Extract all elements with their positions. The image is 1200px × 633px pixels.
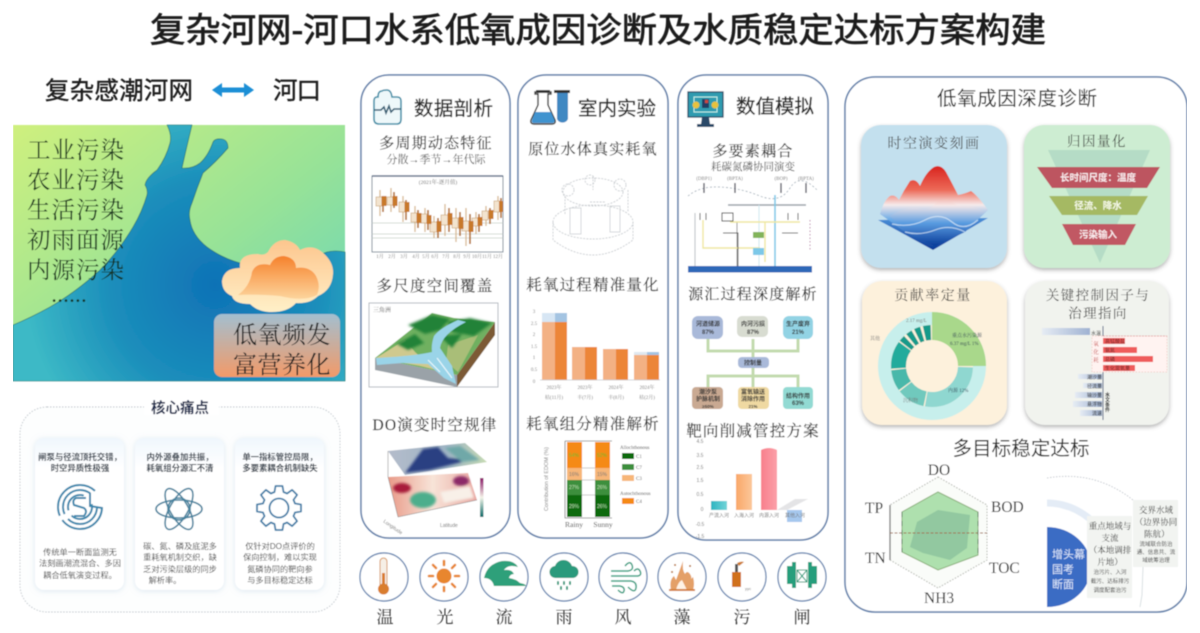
zone: national section xyxy=(1047,527,1091,607)
card: spatial heterogeneity: 法刻画潮流混合、多因 xyxy=(39,558,121,568)
chart: reduction bars: 内源入河 xyxy=(759,512,779,519)
diagram: source-sink flow: 结构作用 xyxy=(786,392,810,400)
zone: national section: 增头幕 xyxy=(1052,547,1085,561)
card: spatial heterogeneity xyxy=(35,438,124,590)
card: source interaction: 碳、氮、磷及底泥多 xyxy=(143,541,217,551)
chart: factor bars: 径流量 xyxy=(1087,383,1102,390)
heading: river network: 复杂感潮河网 xyxy=(45,77,193,105)
chart: stacked components: Allochthonous xyxy=(620,446,649,451)
card: control gap: 保向控制，难以实现 xyxy=(243,552,317,562)
heading: estuary: 河口 xyxy=(273,77,321,105)
icon: algae xyxy=(658,553,706,627)
chart: factor bars: 流速 xyxy=(1092,410,1102,417)
chart: donut: 重点水污染源 xyxy=(952,332,983,339)
diagram: biogeochemical model xyxy=(688,177,818,272)
funnel tier 3 xyxy=(1062,224,1136,245)
chart: factor bars: 潮汐量 xyxy=(1087,374,1102,381)
chart: donut: 内源 12% xyxy=(948,387,968,394)
pollution list: 生活污染 xyxy=(27,197,125,224)
card: attribution: 归因量化 xyxy=(1067,134,1127,149)
chart: radar: TN xyxy=(865,550,886,567)
diagram: source-sink flow: 潮汐泵 xyxy=(699,388,717,396)
chart: reduction bars: -0.5 xyxy=(696,522,705,528)
diagram: source-sink flow: ≥50% xyxy=(702,404,714,409)
chart: stacked components: Contribution of EDOM (%) xyxy=(544,447,550,511)
subheading: component analysis: 耗氧组分精准解析 xyxy=(526,415,660,433)
chart: monthly boxplot: 9月 xyxy=(463,253,471,260)
title: 复杂河网-河口水系低氧成因诊断及水质稳定达标方案构建 xyxy=(150,12,1046,50)
chart: radar xyxy=(865,462,1024,607)
card: control gap: 氮磷协同的靶向参 xyxy=(247,564,313,574)
chart: oxygen consumption bars: 2024年 xyxy=(639,384,655,391)
icon: sluice: 闸 xyxy=(794,608,810,627)
chart: monthly boxplot: 3月 xyxy=(400,253,408,260)
chart: monthly boxplot: 12月 xyxy=(493,253,503,260)
chart: monthly boxplot: 8月 xyxy=(453,253,461,260)
icon: sluice xyxy=(778,553,826,627)
diagram: experiment device xyxy=(553,175,633,255)
panel: numerical simulation xyxy=(678,75,828,540)
zone: national section: 国考 xyxy=(1052,563,1074,576)
chart: stacked components: 16% xyxy=(569,472,580,478)
chart: layered DO map: Longitude xyxy=(382,519,403,536)
icon: light: 光 xyxy=(436,608,454,627)
card: spatial heterogeneity: 时空异质性极强 xyxy=(51,463,110,473)
chart: reduction bars: 3.5 xyxy=(697,453,704,459)
chart: donut: 沉积物 xyxy=(903,397,918,404)
chart: donut: 其他 xyxy=(870,335,880,342)
chart: layered DO map: Latitude xyxy=(440,523,458,529)
chart: stacked components: 15% xyxy=(597,472,608,478)
card: control gap: 与多目标稳定达标 xyxy=(247,575,313,585)
chart: oxygen consumption bars: 2023年 xyxy=(577,384,593,391)
arrow: two-way xyxy=(212,83,254,97)
chart: monthly boxplot: 5月 xyxy=(422,253,430,260)
zone: boundary waters xyxy=(1133,500,1178,567)
chart: oxygen consumption bars: 0.5 xyxy=(531,368,538,373)
chart: 3D surface xyxy=(878,166,988,250)
icon: pollution xyxy=(718,553,766,627)
funnel tier 2: 径流、降水 xyxy=(1074,200,1122,212)
chart: stacked components: 54% xyxy=(569,453,580,459)
diagram: source-sink flow: 87% xyxy=(747,330,760,336)
icon: temperature: 温 xyxy=(376,608,394,627)
subheading: DO pattern: DO演变时空规律 xyxy=(372,416,498,434)
card: control gap: 多要素耦合机制缺失 xyxy=(242,463,318,473)
zone: key areas and tributaries: 支流 xyxy=(1101,533,1119,543)
zone: boundary waters: 流域联合防治 xyxy=(1139,540,1173,548)
zone: boundary waters: 交界水域 xyxy=(1139,505,1173,515)
heading: data analysis: 数据剖析 xyxy=(414,98,493,120)
chart: oxygen consumption bars: 2 xyxy=(533,333,536,338)
chart: factor bars: 高锰酸盐 xyxy=(1105,338,1125,345)
funnel tier 1 xyxy=(1037,167,1160,188)
chart: stacked components: C1 xyxy=(636,455,642,460)
chart: radar: TOC xyxy=(989,560,1020,577)
chart: reduction bars: 1.5 xyxy=(697,478,704,484)
card: attribution xyxy=(1024,125,1170,268)
chart: donut: 6.37 mg/L 1% xyxy=(950,342,979,347)
chart: monthly boxplot: 7月 xyxy=(442,253,450,260)
icon: light xyxy=(420,553,468,627)
pollution list xyxy=(27,137,125,306)
panel: hypoxia diagnosis xyxy=(845,77,1187,612)
icon: data bag xyxy=(374,90,401,124)
image: terrain block xyxy=(369,303,498,387)
chart: oxygen consumption bars: 3 xyxy=(533,310,536,315)
pollution list: 工业污染 xyxy=(27,137,125,164)
diagram: management zones xyxy=(1047,476,1178,607)
chart: factor bars: 总磷 xyxy=(1105,356,1115,363)
image: terrain block: 三角洲 xyxy=(373,306,391,314)
chart: stacked components: Rainy xyxy=(565,520,583,529)
heading: lab experiments: 室内实验 xyxy=(578,98,656,120)
chart: factor bars: 悬浮物 xyxy=(1087,401,1102,408)
chart: reduction bars: 入海入河 xyxy=(734,512,754,519)
icon: algae: 藻 xyxy=(674,608,690,627)
subheading: oxygen process: 耗氧过程精准量化 xyxy=(526,276,660,294)
chart: reduction bars: 0 xyxy=(701,507,704,513)
panel: lab experiments xyxy=(518,75,668,538)
zone: key areas and tributaries: 治污片、入河 xyxy=(1093,568,1127,576)
card: control gap xyxy=(235,438,324,590)
chart: monthly boxplot: 4月 xyxy=(412,253,420,260)
diagram: source-sink flow: 消除作用 xyxy=(741,395,765,403)
diagram: source-sink flow: 21% xyxy=(792,330,805,336)
panel: data analysis xyxy=(361,75,510,538)
chart: factor bars xyxy=(1042,326,1167,420)
chart: reduction bars: 0.5 xyxy=(697,492,704,498)
diagram: biogeochemical model: (DBP1) xyxy=(696,177,712,182)
card: spatiotemporal xyxy=(861,125,1007,268)
diagram: biogeochemical model: (BPTA) xyxy=(727,177,743,182)
chart: stacked components: C7 xyxy=(636,466,642,471)
heading: numerical simulation: 数值模拟 xyxy=(736,96,814,118)
chart: oxygen consumption bars: 1.5 xyxy=(531,345,538,350)
subheading: synergy: 耗碳氮磷协同演变 xyxy=(711,160,795,173)
chart: factor bars: 水温 xyxy=(1091,330,1101,337)
card: contribution xyxy=(862,281,1007,425)
status box xyxy=(214,314,340,379)
subheading: multi-factor coupling: 多要素耦合 xyxy=(712,142,794,160)
zone: boundary waters: 通、信息共、流 xyxy=(1137,548,1176,556)
status box: 富营养化 xyxy=(233,352,331,379)
chart: stacked components: 52% xyxy=(597,453,608,459)
chart: oxygen consumption bars: 2.5 xyxy=(531,322,538,327)
icon: wind: 风 xyxy=(614,608,632,627)
card: control gap: 单一指标管控局限， xyxy=(242,452,318,462)
icon: rain: 雨 xyxy=(556,608,572,627)
pollution list: ...... xyxy=(52,287,88,306)
chart: radar: DO xyxy=(928,462,950,479)
chart: radar: TP xyxy=(865,500,883,517)
card: key factors xyxy=(1025,281,1169,425)
status box: 低氧频发 xyxy=(233,322,331,349)
chart: reduction bars: 其他入河 xyxy=(785,512,805,519)
zone: key areas and tributaries: 片地） xyxy=(1097,557,1123,567)
card: spatiotemporal: 时空演变刻画 xyxy=(888,135,980,152)
chart: stacked components: 26% xyxy=(597,504,608,510)
diagram: source-sink flow: 护脉机制 xyxy=(696,395,720,403)
chart: reduction bars: -1.5 xyxy=(696,534,705,540)
card: source interaction: 重耗氧机制交织，缺 xyxy=(143,552,217,562)
chart: stacked components: C4 xyxy=(636,500,642,505)
funnel tier 2 xyxy=(1049,196,1148,215)
chart: oxygen consumption bars: 2023年 xyxy=(546,384,562,391)
chart: stacked components: Autochthonous xyxy=(620,492,651,497)
chart: radar: NH3 xyxy=(924,590,954,607)
subheading: multi-scale coverage: 多尺度空间覆盖 xyxy=(377,277,493,295)
chart: oxygen consumption bars: 2024年 xyxy=(608,384,624,391)
chart: factor bars: 生化需氧量 xyxy=(1105,365,1130,372)
diagram: source-sink flow: 生产废弃 xyxy=(786,320,810,328)
diagram: source-sink flow: 21% xyxy=(748,404,758,409)
chart: oxygen consumption bars xyxy=(531,310,660,401)
heading: hypoxia diagnosis: 低氧成因深度诊断 xyxy=(937,88,1097,110)
chart: monthly boxplot xyxy=(372,176,503,260)
subheading: multi-period dynamics: 多周期动态特征 xyxy=(379,135,493,152)
icon: monitor xyxy=(688,92,723,127)
card: key factors: 治理指向 xyxy=(1068,305,1128,321)
chart: factor bars: 输沙量 xyxy=(1087,392,1102,399)
panel: factor icons row xyxy=(360,553,826,627)
funnel tier 3: 污染输入 xyxy=(1079,229,1117,241)
chart: factor bars: 氨氮 xyxy=(1105,347,1115,354)
subheading: targeted plan: 靶向削减管控方案 xyxy=(686,422,820,440)
card: key factors: 关键控制因子与 xyxy=(1046,287,1150,303)
funnel tier 1: 长时间尺度：温度 xyxy=(1060,172,1136,184)
zone: boundary waters: 域统筹治理 xyxy=(1142,556,1170,564)
heading: stable compliance: 多目标稳定达标 xyxy=(952,438,1090,460)
chart: stacked components: 29% xyxy=(569,504,580,510)
card: contribution: 贡献率定量 xyxy=(894,287,972,304)
diagram: biogeochemical model: (BOP) xyxy=(774,177,788,182)
card: source interaction: 内外源叠加共振， xyxy=(146,452,214,462)
chart: oxygen consumption bars: 枯(2月) xyxy=(639,394,655,401)
card: source interaction: 耗氧组分源汇不清 xyxy=(146,463,214,473)
chart: reduction bars xyxy=(696,439,808,540)
card: source interaction xyxy=(135,438,224,590)
icon: temperature xyxy=(360,553,408,627)
zone: key areas and tributaries: （本地调排 xyxy=(1089,545,1132,555)
chart: monthly boxplot: (2021年-逐月值) xyxy=(419,178,457,186)
chart: stacked components: 26% xyxy=(597,485,608,491)
chart: stacked components: Sunny xyxy=(593,520,613,529)
icon: maze xyxy=(58,485,102,529)
river and estuary water xyxy=(13,125,345,381)
card: spatial heterogeneity: 传统单一断面监测无 xyxy=(43,547,117,557)
icon: flow: 流 xyxy=(496,608,512,627)
card: spatial heterogeneity: 闸泵与径流顶托交错， xyxy=(38,452,122,462)
card: source interaction: 解析率。 xyxy=(149,575,181,585)
subheading: in situ oxygen demand: 原位水体真实耗氧 xyxy=(528,140,658,158)
zone: key areas and tributaries: 截污、达标排污 xyxy=(1091,577,1130,585)
diagram: source-sink flow: 富氧输送 xyxy=(741,388,765,396)
chart: monthly boxplot: 10月 xyxy=(472,253,482,260)
chart: layered DO map xyxy=(382,443,487,536)
subheading: time scales: 分散→季节→年代际 xyxy=(386,152,486,166)
chart: factor bars: 水文条件 xyxy=(1104,391,1110,413)
panel: core pain points xyxy=(20,399,340,612)
diagram: source-sink flow: 内河污损 xyxy=(741,320,765,328)
chart: factor bars: 化 xyxy=(1093,348,1099,356)
chart: oxygen consumption bars: 1 xyxy=(533,356,536,361)
zone: key areas and tributaries: 重点地域与 xyxy=(1089,521,1131,531)
chart: factor bars: 氧 xyxy=(1093,340,1099,348)
card: source interaction: 乏对污染层级的同步 xyxy=(143,564,217,574)
chart: monthly boxplot: 1月 xyxy=(376,253,384,260)
subheading: source-sink analysis: 源汇过程深度解析 xyxy=(688,285,818,303)
hypoxia plume cloud xyxy=(222,240,333,312)
pollution list: 初雨面源 xyxy=(27,227,125,254)
chart: monthly boxplot: 2月 xyxy=(388,253,396,260)
icon: flow xyxy=(480,553,528,627)
diagram: source-sink flow: 63% xyxy=(792,401,805,407)
map illustration xyxy=(13,125,345,381)
diagram: source-sink flow: 87% xyxy=(702,330,715,336)
icon: gear xyxy=(257,486,301,530)
panel: river network and estuary xyxy=(13,77,345,381)
chart: oxygen consumption bars: 0 xyxy=(533,380,536,385)
icon: pollution: 污 xyxy=(734,608,750,627)
chart: stacked components: 27% xyxy=(569,485,580,491)
diagram: source-sink flow xyxy=(692,316,813,409)
chart: donut xyxy=(870,312,986,414)
chart: donut: 2.17 mg/L xyxy=(906,319,927,324)
chart: monthly boxplot: 6月 xyxy=(431,253,439,260)
zone: key areas and tributaries xyxy=(1087,516,1132,598)
chart: reduction bars: 2.5 xyxy=(697,465,704,471)
icon: rain xyxy=(540,553,588,627)
chart: oxygen consumption bars: 丰(7月) xyxy=(577,394,593,401)
chart: reduction bars: 4.5 xyxy=(697,439,704,445)
chart: oxygen consumption bars: 枯(11月) xyxy=(545,394,563,401)
card: spatial heterogeneity: 耦合低氧演变过程。 xyxy=(43,570,117,580)
pollution list: 内源污染 xyxy=(27,257,125,284)
icon: atom xyxy=(156,485,202,533)
zone: key areas and tributaries: 调度配套治污 xyxy=(1093,586,1127,594)
chart: radar: BOD xyxy=(991,499,1024,516)
chart: stacked components xyxy=(544,441,651,529)
card: control gap: 仅针对DO点评价的 xyxy=(245,541,315,551)
chart: monthly boxplot: 11月 xyxy=(482,253,492,260)
heading: core pain points: 核心痛点 xyxy=(151,399,209,417)
chart: stacked components: C3 xyxy=(636,477,642,482)
zone: boundary waters: （边界协同 xyxy=(1135,517,1177,527)
zone: boundary waters: 陈航） xyxy=(1144,529,1170,539)
icon: pollution: yyc xyxy=(745,586,751,591)
icon: wind xyxy=(599,553,647,627)
diagram: source-sink flow: 河道储源 xyxy=(696,320,720,328)
icon: flasks xyxy=(531,90,570,124)
diagram: source-sink flow: 控制量 xyxy=(744,359,762,367)
zone: national section: 断面 xyxy=(1052,577,1074,591)
pollution list: 农业污染 xyxy=(27,167,125,194)
chart: reduction bars: 产流入河 xyxy=(709,512,729,519)
chart: oxygen consumption bars: 丰(8月) xyxy=(608,394,624,401)
diagram: biogeochemical model: (BPTA) xyxy=(798,177,814,182)
chart: factor bars: 耗 xyxy=(1093,356,1099,364)
